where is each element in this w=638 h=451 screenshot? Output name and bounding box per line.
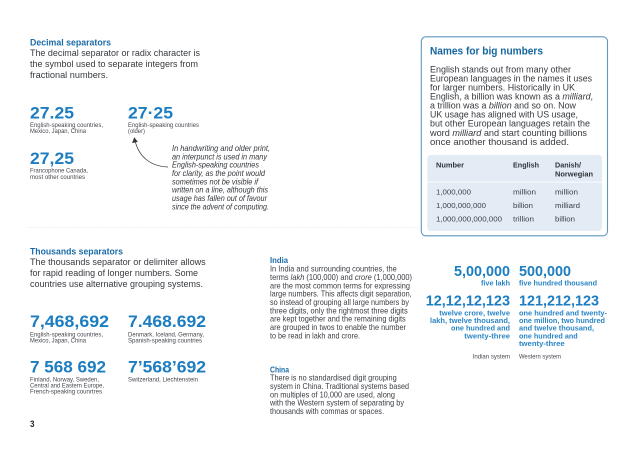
panel: Indian system examples (426, 264, 510, 361)
text block: India: are the most common terms for expressing (270, 281, 410, 290)
text block: India: India (270, 256, 288, 265)
table: number names: 1,000,000 (436, 188, 471, 197)
text block: India: terms lakh (100,000) and crore (1,000,000) (270, 273, 412, 282)
text block: China: There is no standardised digit grouping (270, 374, 397, 383)
callout: interpunct note: for clarity, as the point would (172, 169, 265, 178)
callout: interpunct note: usage has fallen out of favour (172, 194, 267, 203)
panel: Indian system examples: twelve crore, twelve (439, 308, 510, 317)
text block: thousands intro: countries use alternative grouping systems. (30, 279, 203, 290)
text block: names explanation: UK usage has aligned with US usage, (430, 110, 578, 121)
text block: China: China (270, 366, 289, 375)
example: space grouping: French-speaking counrtres (30, 389, 103, 396)
table: number names: million (555, 188, 578, 197)
table: number names: milliard (555, 201, 580, 210)
text block: thousands intro: The thousands separator or delimiter allows (30, 257, 206, 268)
text block: names explanation: a trillion was a billion and so on. Now (430, 101, 576, 112)
panel: Western system examples: and twelve thousand, (519, 324, 594, 333)
text block: names explanation: English, a billion was known as a milliard, (430, 92, 593, 103)
panel: Western system examples: 121,212,123 (519, 294, 599, 310)
text block: decimal intro (30, 48, 200, 81)
table: number names: trillion (513, 214, 534, 223)
text block: India: In India and surrounding countries, the (270, 265, 397, 274)
text block: thousands intro (30, 257, 206, 290)
example: 27.25: Mexico, Japan, China (30, 128, 86, 135)
panel: thousands separators (30, 246, 206, 396)
text block: India: three digits, only the rightmost three digits (270, 306, 408, 315)
example: comma grouping (30, 313, 109, 344)
panel: Western system examples: twenty-three (519, 339, 565, 348)
example: 27,25: 27,25 (30, 150, 74, 168)
callout: interpunct note (172, 144, 270, 211)
example: 27.25 (30, 104, 103, 135)
text block: China: on multiples of 10,000 are used, along (270, 390, 395, 399)
table: number names: Norwegian (555, 170, 593, 179)
panel: Indian system examples: 5,00,000 (454, 264, 510, 280)
panel: Indian system examples: one hundred and (451, 324, 510, 333)
callout: interpunct note: an interpunct is used in many (172, 152, 268, 161)
text block: names explanation: English stands out from many other (430, 65, 572, 76)
example: space grouping (30, 358, 106, 396)
example: space grouping: 7 568 692 (30, 358, 106, 376)
example: 27·25: English-speaking countries (128, 122, 200, 129)
panel: Western system examples: 500,000 (519, 264, 571, 280)
callout: interpunct note: English-speaking countries (172, 161, 259, 170)
panel: Western system examples: one million, two hundred (519, 316, 605, 325)
example: point grouping: Spanish-speaking countries (128, 337, 203, 344)
text block: thousands intro: for rapid reading of longer numbers. Some (30, 268, 198, 279)
example: space grouping: Central and Eastern Europe, (30, 383, 104, 390)
text block: India (270, 256, 412, 340)
example: 27·25 (128, 104, 200, 135)
example: 27,25: most other countries (30, 174, 86, 181)
text block: names explanation: word milliard and start counting billions (429, 128, 587, 139)
example: comma grouping: 7,468,692 (30, 313, 109, 331)
example: 27,25: Francophone Canada, (30, 168, 88, 175)
table: number names (427, 155, 602, 231)
text block: names explanation: but other European languages retain the (430, 119, 590, 130)
text block: India: to be read in lakh and crore. (270, 331, 360, 340)
text block: names explanation: for larger numbers. Historically in UK (430, 83, 576, 94)
table: number names: 1,000,000,000 (436, 201, 486, 210)
text block: India: large numbers. This affects digit separation, (270, 290, 412, 299)
heading: thousands separators: Thousands separators (30, 246, 123, 257)
panel: Western system examples: Western system (519, 354, 561, 361)
text block: China: system in China. Traditional systems based (270, 382, 409, 391)
text block: names explanation: European languages in the names it uses (430, 74, 592, 85)
example: point grouping: Denmark, Iceland, Germany, (128, 331, 204, 338)
panel: Western system examples: one hundred and twenty- (519, 308, 607, 317)
panel: Indian system examples: twenty-three (464, 331, 510, 340)
text block: names explanation (429, 65, 593, 148)
example: point grouping (128, 313, 206, 344)
example: 27.25: 27.25 (30, 104, 74, 122)
example: point grouping: 7.468.692 (128, 313, 206, 331)
text block: China: with the Western system of separating by (269, 399, 405, 408)
panel: names for big numbers (421, 37, 608, 236)
arrow: interpunct note to 27·25 (133, 138, 168, 167)
panel: Indian system examples: five lakh (481, 278, 510, 287)
panel: Indian system examples: lakh, twelve thousand, (430, 316, 510, 325)
text block: decimal intro: fractional numbers. (30, 70, 108, 81)
heading: names for big numbers: Names for big numbers (430, 45, 543, 57)
text block: India: are kept together and the remaining digits (270, 315, 406, 324)
callout: interpunct note: In handwriting and older print, (172, 144, 270, 153)
panel: Western system examples: five hundred thousand (519, 278, 597, 287)
example: apostrophe grouping (128, 358, 206, 384)
panel: decimal separators (30, 38, 270, 211)
text block: India: are grouped in twos to enable the number (270, 323, 406, 332)
example: 27·25: (older) (128, 128, 145, 135)
panel: Western system examples (519, 264, 607, 361)
example: comma grouping: English-speaking countries, (30, 331, 103, 338)
text block: China (269, 366, 409, 416)
table: number names: 1,000,000,000,000 (436, 214, 502, 223)
text block: China: thousands with commas or spaces. (270, 407, 384, 416)
callout: interpunct note: sometimes not be visible if (172, 177, 259, 186)
page number: 3 (30, 419, 35, 429)
table: number names: Number (436, 161, 464, 170)
text block: India: so instead of grouping all large numbers by (270, 298, 410, 307)
panel: Indian system examples: Indian system (473, 354, 510, 361)
example: apostrophe grouping: Switzerland, Liechtenstein (128, 377, 198, 384)
panel: Western system examples: one hundred and (519, 331, 578, 340)
table: number names: billion (513, 201, 533, 210)
table: number names: Danish/ (555, 161, 582, 170)
example: space grouping: Finland, Norway, Sweden, (30, 377, 99, 384)
callout: interpunct note: since the advent of computing. (172, 202, 269, 211)
example: apostrophe grouping: 7’568’692 (128, 358, 206, 376)
example: comma grouping: Mexico, Japan, China (30, 337, 86, 344)
text block: decimal intro: the symbol used to separate integers from (30, 59, 198, 70)
example: 27.25: English-speaking countries, (30, 122, 103, 129)
text block: decimal intro: The decimal separator or radix character is (30, 48, 200, 59)
example: 27·25: 27·25 (128, 104, 173, 122)
example: 27,25 (30, 150, 88, 181)
callout: interpunct note: written on a line, although this (172, 186, 268, 195)
heading: decimal separators: Decimal separators (30, 38, 111, 48)
panel: Indian system examples: 12,12,12,123 (426, 294, 510, 310)
table: number names: billion (555, 214, 575, 223)
text block: names explanation: once another thousand is added. (430, 137, 569, 148)
table: number names: million (513, 188, 536, 197)
table: number names: English (513, 161, 539, 170)
